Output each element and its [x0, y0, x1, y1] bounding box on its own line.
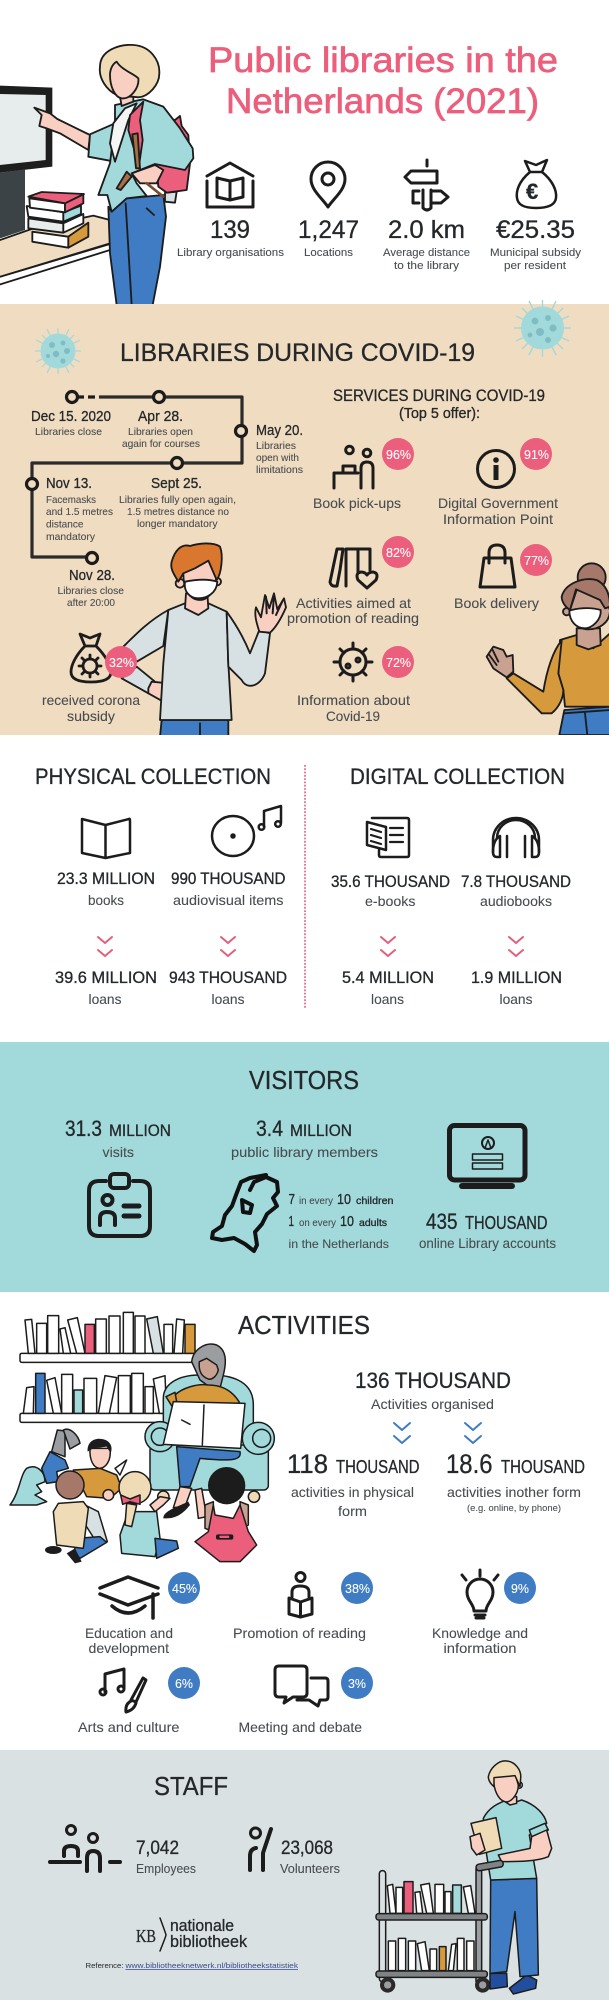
- timeline: Facemasks: [46, 494, 96, 506]
- reference line: www.bibliotheeknetwerk.nl/bibliotheekstatistiek: [124, 1961, 298, 1970]
- stat: visits: MILLION: [109, 1121, 171, 1140]
- category: promotion of reading: Promotion of reading: [233, 1625, 366, 1641]
- stat: audiobooks: [461, 818, 571, 1007]
- icon: headphones: [493, 818, 539, 857]
- category: education and development: Education and: [85, 1625, 173, 1641]
- stat: audiovisual items: [169, 806, 287, 1007]
- timeline: distance: [46, 518, 84, 530]
- stat: e-books: [331, 818, 450, 1007]
- logo: KB nationale bibliotheek: bibliotheek: [170, 1932, 247, 1951]
- category: arts and culture: 6%: [175, 1676, 193, 1691]
- timeline: after 20:00: [67, 597, 115, 609]
- logo: KB nationale bibliotheek: [136, 1916, 247, 1951]
- stat: members: 1: [288, 1213, 294, 1230]
- logo: KB nationale bibliotheek: nationale: [170, 1916, 234, 1935]
- timeline: longer mandatory: [137, 518, 218, 530]
- icon: information: [478, 450, 514, 488]
- service: activities aimed at promotion of reading: 82%: [386, 545, 411, 560]
- service: information about covid-19: [297, 643, 414, 724]
- panel: libraries during covid-19: [0, 300, 609, 737]
- stat: average distance: Average distance: [383, 247, 470, 259]
- stat: average distance: [383, 160, 470, 272]
- panel: visitors: [0, 1042, 609, 1292]
- panel: collections: [0, 735, 609, 1042]
- stat: members: 10: [337, 1191, 351, 1208]
- timeline: and 1.5 metres: [46, 506, 113, 518]
- icon: monitor with login: [450, 1126, 525, 1189]
- stat: members: 10: [340, 1213, 354, 1230]
- icon: speech bubbles: [275, 1666, 328, 1706]
- stat: municipal subsidy: per resident: [504, 260, 566, 272]
- stat: online accounts: 435: [426, 1209, 458, 1234]
- icon: graduation cap: [100, 1577, 158, 1618]
- chevrons: [381, 937, 395, 956]
- stat: physical activities: activities in physical: [291, 1484, 414, 1500]
- timeline: May 20.: [256, 422, 303, 439]
- timeline: Libraries fully open again,: [119, 494, 236, 506]
- title: Netherlands (2021): [226, 82, 539, 121]
- icon: disc and music notes: [212, 806, 281, 856]
- stat: books: [55, 819, 157, 1007]
- icon: money bag with euro: €: [526, 179, 538, 204]
- stat: audiovisual items: loans: [212, 991, 244, 1007]
- timeline: Dec 15. 2020: [31, 408, 111, 425]
- stat: audiobooks: loans: [500, 991, 532, 1007]
- service: book delivery: [454, 544, 552, 611]
- icon: open book: [82, 819, 130, 858]
- stat: audiobooks: 7.8 THOUSAND: [461, 873, 571, 891]
- category: arts and culture: [78, 1667, 200, 1735]
- stat: locations: Locations: [304, 247, 354, 259]
- category: meeting and debate: 3%: [348, 1676, 366, 1691]
- timeline: Sept 25.: [151, 475, 202, 492]
- chevrons: [394, 1423, 481, 1443]
- stat: members: in the Netherlands: [288, 1237, 389, 1251]
- category: meeting and debate: [238, 1666, 373, 1735]
- icon: person reading: [289, 1572, 312, 1617]
- service: book pick-ups: [313, 438, 414, 511]
- heading: digital collection: DIGITAL COLLECTION: [350, 764, 565, 789]
- stat: audiobooks: 1.9 MILLION: [471, 969, 562, 987]
- stat: activities organised: Activities organised: [371, 1396, 494, 1412]
- stat: physical activities: 118: [287, 1449, 328, 1479]
- stat: e-books: 35.6 THOUSAND: [331, 873, 450, 891]
- stat: activities in other form: 18.6: [446, 1449, 492, 1479]
- panel: introduction: [0, 0, 609, 305]
- stat: e-books: loans: [371, 991, 404, 1007]
- stat: visits: visits: [102, 1144, 134, 1160]
- service: activities aimed at promotion of reading: [287, 536, 419, 626]
- service: information about covid-19: 72%: [386, 655, 411, 670]
- service: information about covid-19: Information about: [297, 692, 410, 708]
- chevrons: [509, 937, 523, 956]
- stat: received corona subsidy: 32%: [109, 655, 134, 670]
- stat: books: 39.6 MILLION: [55, 969, 157, 987]
- category: promotion of reading: 38%: [345, 1581, 370, 1596]
- timeline: mandatory: [46, 531, 96, 543]
- stat: municipal subsidy: [490, 160, 582, 272]
- stat: books: 23.3 MILLION: [57, 870, 155, 888]
- stat: physical activities: form: [338, 1503, 367, 1519]
- stat: locations: [298, 162, 359, 259]
- timeline: Libraries open: [128, 426, 193, 438]
- stat: locations: 1,247: [298, 216, 359, 244]
- icon: books with heart: [330, 549, 377, 588]
- timeline: Apr 28.: [138, 408, 183, 425]
- stat: members: on every: [299, 1218, 336, 1229]
- timeline: Libraries close: [58, 585, 124, 597]
- service: book delivery: Book delivery: [454, 595, 539, 611]
- title: [208, 41, 558, 121]
- service: digital government information point: 91%: [524, 447, 549, 462]
- stat: members: 3.4: [256, 1116, 283, 1141]
- stat: received corona subsidy: received corona: [42, 692, 140, 708]
- icon: volunteer: [250, 1828, 271, 1870]
- service: digital government information point: [438, 438, 558, 527]
- stat: e-books: e-books: [365, 893, 416, 909]
- stat: employees: Employees: [136, 1861, 196, 1876]
- stat: members: adults: [359, 1217, 387, 1229]
- timeline: [26, 392, 303, 609]
- chevrons: [221, 937, 235, 956]
- service: digital government information point: Information Point: [443, 511, 553, 527]
- heading: physical collection: PHYSICAL COLLECTION: [35, 764, 271, 789]
- stat: physical activities: THOUSAND: [336, 1457, 420, 1477]
- stat: members: [212, 1116, 394, 1251]
- stat: audiovisual items: audiovisual items: [173, 892, 284, 908]
- icon: virus outline: [334, 643, 372, 681]
- icon: music notes and brush: [100, 1669, 146, 1712]
- stat: municipal subsidy: €25.35: [496, 216, 575, 244]
- stat: visits: 31.3: [65, 1116, 102, 1141]
- stat: activities in other form: activities inother form: [447, 1484, 581, 1500]
- icon: desk with two people: [334, 446, 373, 488]
- stat: volunteers: 23,068: [281, 1838, 333, 1859]
- stat: employees: 7,042: [136, 1838, 179, 1859]
- stat: online accounts: [419, 1126, 556, 1251]
- stat: received corona subsidy: subsidy: [67, 708, 115, 724]
- stat: employees: [50, 1826, 196, 1876]
- heading: ACTIVITIES: [238, 1310, 370, 1340]
- stat: library organisations: Library organisations: [177, 247, 285, 259]
- timeline: Nov 28.: [69, 567, 115, 584]
- timeline: limitations: [256, 464, 303, 476]
- service: information about covid-19: Covid-19: [326, 708, 380, 724]
- stat: average distance: 2.0 km: [388, 216, 465, 244]
- stat: members: public library members: [231, 1144, 378, 1160]
- illustration: woman with mask: [487, 563, 609, 735]
- chevrons: [98, 937, 112, 956]
- services heading: [333, 387, 545, 422]
- stat: volunteers: Volunteers: [280, 1861, 340, 1876]
- stat: books: books: [88, 892, 124, 908]
- stat: volunteers: [250, 1828, 340, 1876]
- category: arts and culture: Arts and culture: [78, 1719, 180, 1735]
- timeline: Libraries: [256, 440, 296, 452]
- category: knowledge and information: [432, 1570, 536, 1656]
- stat: members: 7: [288, 1191, 295, 1208]
- timeline: Nov 13.: [46, 475, 92, 492]
- heading: VISITORS: [249, 1065, 359, 1095]
- panel: activities: [0, 1292, 609, 1750]
- service: book delivery: 77%: [524, 553, 549, 568]
- services heading: (Top 5 offer):: [399, 406, 480, 422]
- stat: visits: [65, 1116, 171, 1236]
- stat: audiovisual items: 990 THOUSAND: [171, 870, 286, 888]
- service: book pick-ups: 96%: [386, 447, 411, 462]
- stat: members: MILLION: [290, 1121, 352, 1140]
- icon: money bag with virus: [71, 634, 111, 682]
- icon: virus right: [514, 300, 571, 357]
- stat: activities organised: [355, 1368, 511, 1443]
- category: promotion of reading: [233, 1572, 373, 1641]
- timeline: open with: [256, 452, 299, 464]
- icon: shopping bag: [480, 545, 515, 587]
- stat: members: children: [356, 1195, 394, 1207]
- stat: activities in other form: (e.g. online, by phone): [467, 1503, 561, 1513]
- stat: audiobooks: audiobooks: [480, 893, 552, 909]
- stat: activities organised: 136 THOUSAND: [355, 1368, 511, 1393]
- icon: house with book: [207, 163, 253, 207]
- category: knowledge and information: Knowledge and: [432, 1625, 528, 1641]
- category: knowledge and information: information: [444, 1640, 516, 1656]
- service: activities aimed at promotion of reading: promotion of reading: [287, 610, 419, 626]
- icon: signpost: [405, 160, 448, 210]
- heading: STAFF: [154, 1771, 228, 1801]
- heading: LIBRARIES DURING COVID-19: [120, 339, 475, 367]
- logo: KB nationale bibliotheek: KB: [136, 1926, 156, 1946]
- service: book pick-ups: Book pick-ups: [313, 495, 401, 511]
- stat: e-books: 5.4 MILLION: [342, 969, 434, 987]
- stat: members: in every: [299, 1196, 333, 1207]
- category: meeting and debate: Meeting and debate: [238, 1719, 362, 1735]
- icon: tablet with book: [367, 818, 409, 857]
- timeline: Libraries close: [35, 426, 102, 438]
- stat: audiovisual items: 943 THOUSAND: [169, 969, 287, 987]
- icon: light bulb: [462, 1570, 498, 1618]
- category: education and development: development: [88, 1640, 169, 1656]
- illustration: man with book trolley: [376, 1761, 552, 1994]
- icon: map of the Netherlands: [212, 1175, 278, 1251]
- panel: staff: [0, 1750, 609, 2000]
- service: activities aimed at promotion of reading: Activities aimed at: [296, 595, 411, 611]
- stat: library organisations: [177, 163, 285, 259]
- illustration: woman reading to children: [10, 1312, 274, 1563]
- stat: online accounts: online Library accounts: [419, 1235, 556, 1251]
- service: digital government information point: Digital Government: [438, 495, 558, 511]
- timeline: again for courses: [122, 438, 200, 450]
- services heading: SERVICES DURING COVID-19: [333, 387, 545, 405]
- title: Public libraries in the: [208, 41, 558, 80]
- stat: online accounts: THOUSAND: [465, 1213, 548, 1233]
- stat: activities in other form: THOUSAND: [501, 1457, 585, 1477]
- stat: physical activities: [287, 1449, 420, 1519]
- stat: library organisations: 139: [210, 216, 250, 244]
- icon: membership card: [89, 1174, 150, 1236]
- icon: map pin: [311, 162, 345, 207]
- timeline: 1.5 metres distance no: [127, 506, 229, 518]
- illustration: man with mask: [122, 543, 286, 737]
- stat: average distance: to the library: [394, 260, 460, 272]
- stat: books: loans: [88, 991, 122, 1007]
- category: education and development: [85, 1572, 200, 1656]
- icon: employees at desk: [50, 1826, 120, 1871]
- icon: virus left: [35, 328, 81, 374]
- stat: activities in other form: [446, 1449, 585, 1513]
- stat: municipal subsidy: Municipal subsidy: [490, 247, 582, 259]
- reference line: Reference:: [86, 1961, 124, 1970]
- illustration: woman at screen with books: [0, 45, 193, 305]
- category: knowledge and information: 9%: [511, 1581, 529, 1596]
- category: education and development: 45%: [172, 1581, 197, 1596]
- stat: received corona subsidy: [42, 634, 140, 724]
